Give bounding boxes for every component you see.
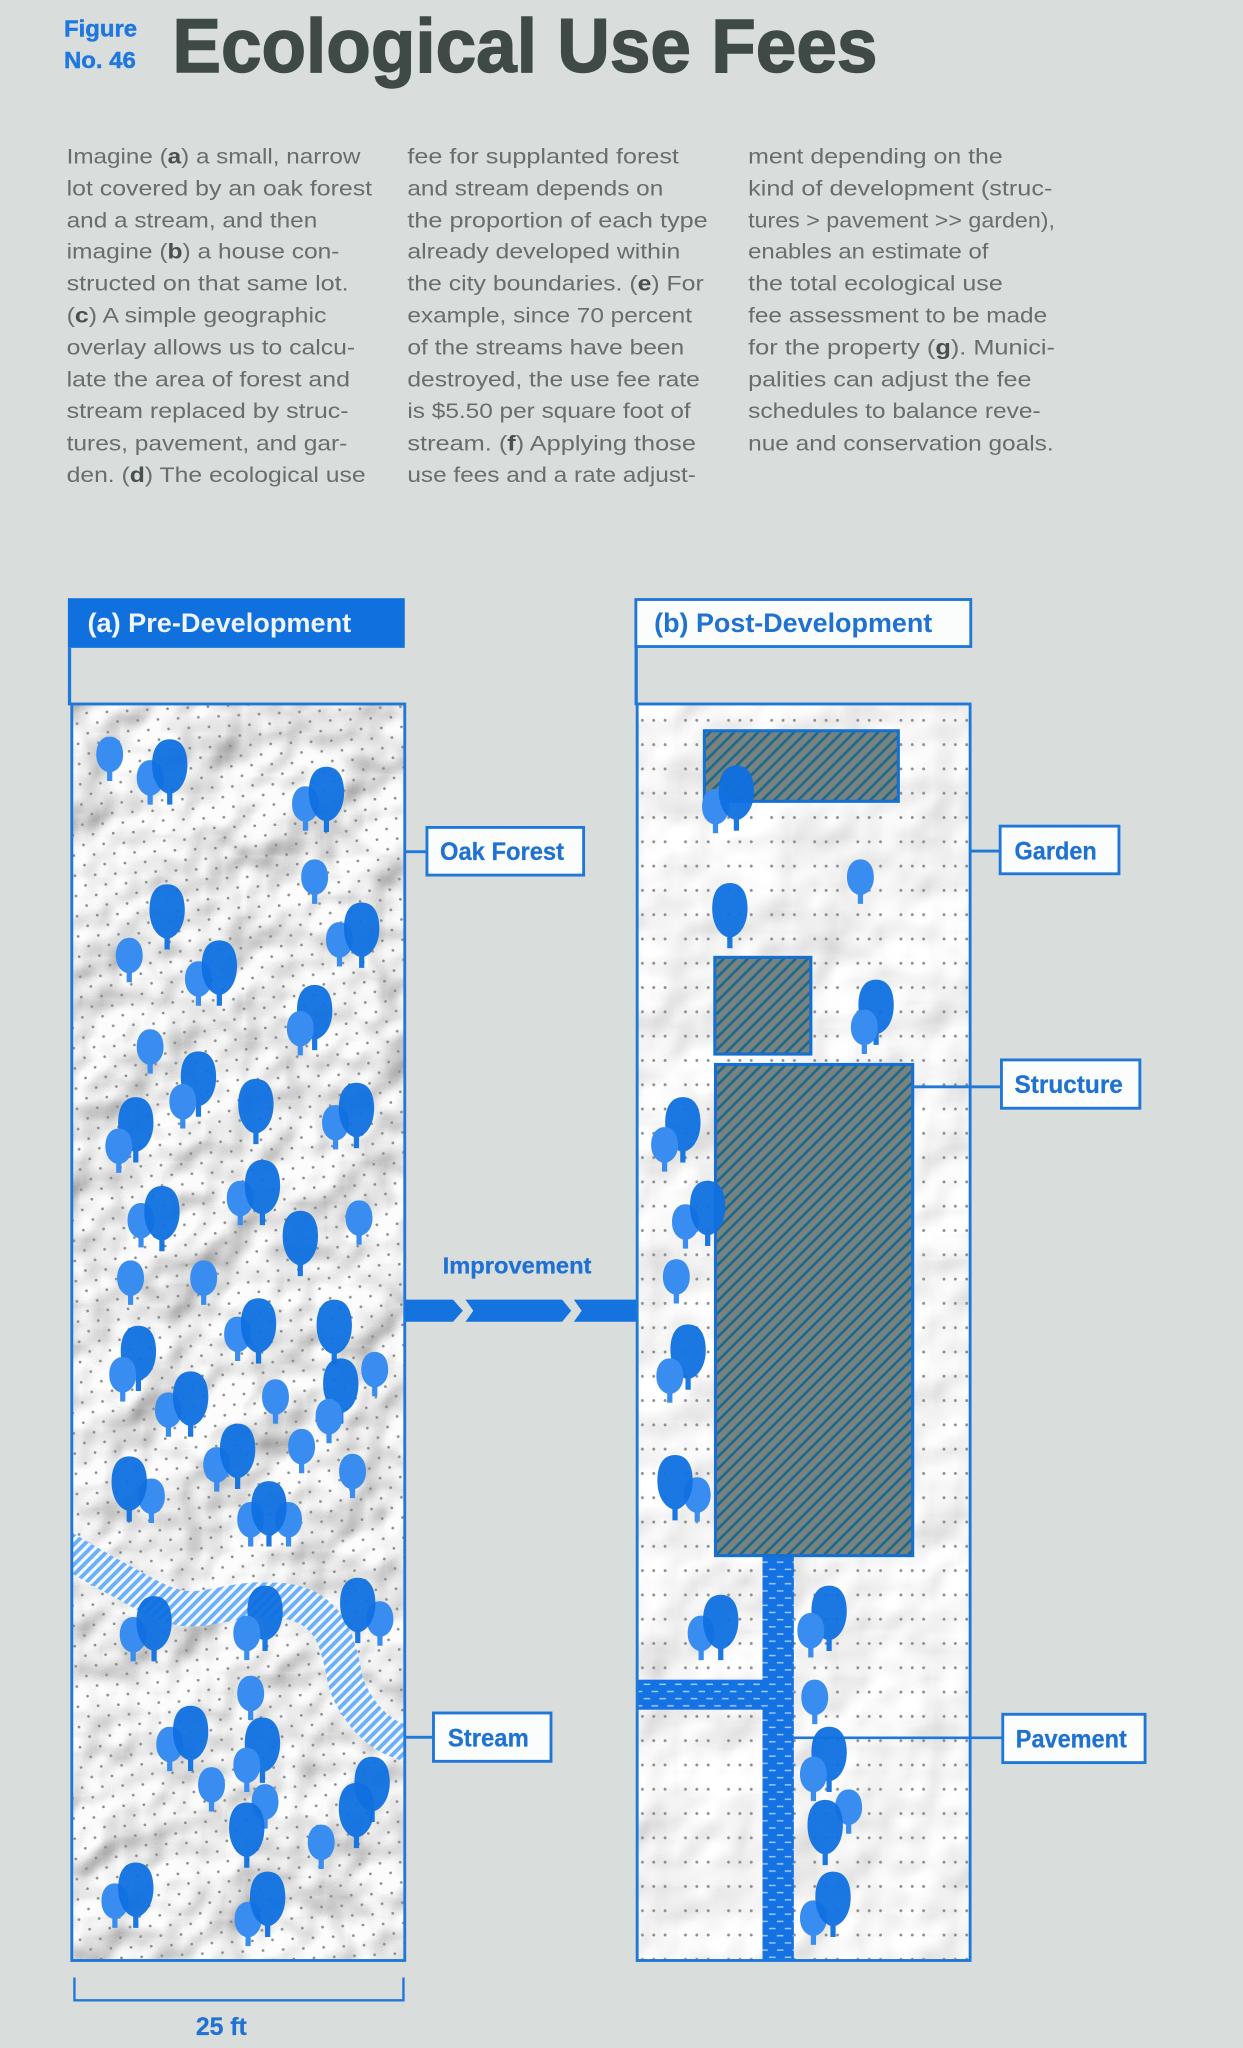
panel header: pre-development: (a) Pre-Development: [87, 608, 351, 638]
text block: column 2: already developed within: [407, 240, 680, 264]
structure: main house: [716, 1064, 913, 1556]
callout: pavement: [1003, 1714, 1145, 1763]
text block: column 2: stream. ( f) Applying those: [407, 432, 696, 456]
arrow: improvement chevrons: [405, 1300, 637, 1322]
dimension bracket: [74, 1977, 403, 2000]
text block: column 3: enables an estimate of: [748, 240, 990, 264]
callout: structure: [913, 1060, 1140, 1108]
panel header: pre-development: [68, 598, 405, 648]
text block: column 1: [67, 144, 372, 487]
connector from header to lot: [68, 648, 71, 705]
text block: column 3: ment depending on the: [748, 144, 1003, 168]
lot ground: garden with dots: [637, 704, 970, 1960]
text block: column 3: tures > pavement >> garden),: [748, 208, 1055, 232]
text block: column 2: use fees and a rate adjust-: [407, 463, 696, 487]
pavement road: [637, 1556, 794, 1960]
panel header: post-development: (b) Post-Development: [654, 608, 932, 638]
trees: oak forest: [96, 737, 393, 1946]
text block: column 3: nue and conservation goals.: [748, 432, 1054, 456]
text block: column 3: schedules to balance reve-: [748, 399, 1041, 423]
text block: column 1: imagine ( b) a house con-: [67, 240, 339, 264]
callout: garden: [970, 826, 1119, 874]
text block: column 2: and stream depends on: [407, 176, 663, 200]
panel header: post-development: [636, 600, 971, 647]
text block: column 3: for the property ( g). Munici-: [748, 336, 1055, 360]
text block: column 1: and a stream, and then: [67, 208, 317, 232]
heading: figure number: Figure: [64, 16, 137, 42]
lot border: [72, 704, 405, 1960]
pavement leader line: [794, 1736, 1003, 1739]
text block: column 2: is $5.50 per square foot of: [407, 399, 692, 423]
text block: column 1: structed on that same lot.: [67, 272, 349, 296]
text block: column 1: tures, pavement, and gar-: [67, 432, 347, 456]
text block: column 1: Imagine ( a) a small, narrow: [67, 144, 361, 168]
callout: stream: Stream: [448, 1725, 529, 1752]
text block: column 2: destroyed, the use fee rate: [407, 368, 700, 392]
text block: column 1: (c) A simple geographic: [67, 304, 327, 328]
text block: column 2: fee for supplanted forest: [407, 144, 679, 168]
callout: structure: Structure: [1015, 1072, 1123, 1099]
callout: pavement: Pavement: [1016, 1727, 1127, 1754]
panel: post-development lot: [635, 600, 1003, 1960]
callout: oak forest: [405, 827, 584, 875]
callout: garden: Garden: [1015, 838, 1097, 865]
text block: column 1: late the area of forest and: [67, 368, 350, 392]
text block: column 1: stream replaced by struc-: [67, 399, 349, 423]
text block: column 2: the proportion of each type: [407, 208, 708, 232]
text block: column 1: overlay allows us to calcu-: [67, 336, 355, 360]
text block: column 2: of the streams have been: [407, 336, 684, 360]
connector from header to lot: [635, 647, 638, 705]
structure: garage: [704, 731, 898, 801]
structure: shed: [715, 957, 811, 1054]
label: improvement: Improvement: [443, 1252, 592, 1278]
text block: column 3: palities can adjust the fee: [748, 368, 1032, 392]
lot border: [637, 704, 970, 1960]
lot ground: crumpled paper with dots: [72, 704, 405, 1960]
heading: figure number: No. 46: [64, 47, 136, 73]
callout: oak forest: Oak Forest: [440, 839, 564, 866]
text block: column 2: [407, 144, 708, 487]
heading: figure number: [64, 16, 137, 73]
text block: column 3: kind of development (struc-: [748, 176, 1052, 200]
text block: column 2: the city boundaries. ( e) For: [407, 272, 704, 296]
text block: column 3: the total ecological use: [748, 272, 1003, 296]
text block: column 1: den. ( d) The ecological use: [67, 463, 366, 487]
text block: column 3: [748, 144, 1055, 456]
dimension label: 25 ft: [196, 2014, 247, 2041]
trees: remaining: [651, 765, 894, 1945]
text block: column 3: fee assessment to be made: [748, 304, 1047, 328]
text block: column 1: lot covered by an oak forest: [67, 176, 372, 200]
stream: [59, 1545, 418, 1748]
callout: stream: [405, 1713, 551, 1761]
panel: pre-development lot: [59, 598, 418, 1960]
title: Ecological Use Fees: [172, 4, 877, 89]
text block: column 2: example, since 70 percent: [407, 304, 692, 328]
